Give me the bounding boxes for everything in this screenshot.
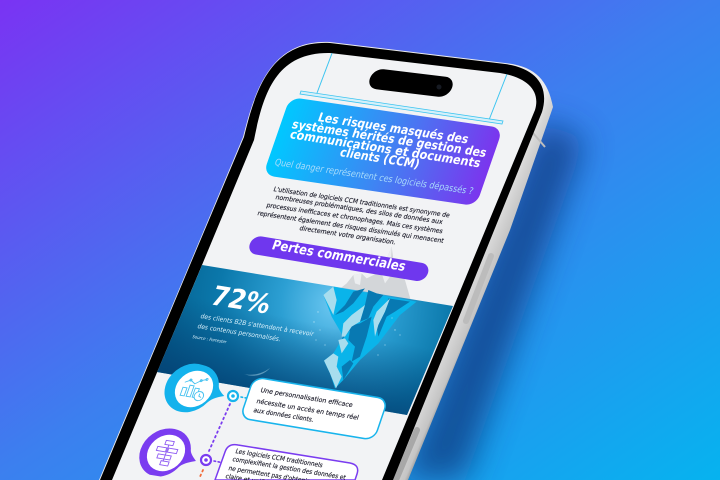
black bezel [100, 43, 544, 480]
statistic 72%: 72% [207, 281, 275, 320]
antenna band [533, 133, 545, 147]
hanging lines and rail [300, 48, 507, 124]
connector purple [214, 461, 224, 463]
callout 1: aux données clients. [252, 406, 315, 424]
intro paragraph: nombreuses problématiques, des silos de données aux [274, 193, 444, 226]
statistic description: des contenus personnalisés. [196, 322, 282, 343]
title banner [263, 97, 503, 206]
power button [396, 430, 417, 480]
faint diver silhouette [244, 368, 270, 376]
callout 1 [240, 377, 388, 440]
intro paragraph: L'utilisation de logiciels CCM traditionnels est synonyme de [272, 185, 451, 219]
dotted timeline [209, 404, 230, 451]
banner title: systèmes hérités de gestion des [290, 116, 489, 160]
chart and clock glyph [180, 378, 208, 402]
volume button [466, 256, 491, 321]
flow glyph [156, 440, 178, 466]
banner title [288, 109, 489, 171]
connector blue [241, 397, 251, 399]
banner title: clients (CCM) [338, 144, 422, 171]
source: Source : Forrester [191, 334, 228, 345]
icon bubble: data chart [164, 364, 224, 412]
icon bubble: data silos [139, 428, 196, 476]
intro paragraph: directement votre organisation. [298, 224, 397, 246]
phone shadow [400, 120, 585, 480]
callout 2: Les logiciels CCM traditionnels [234, 447, 325, 469]
water specks [313, 311, 401, 356]
intro paragraph [256, 185, 451, 246]
screen [112, 53, 536, 480]
intro paragraph: représentent également des risques dissimulés qui menacent [256, 209, 445, 245]
timeline node blue [228, 391, 238, 401]
callout 2 [215, 445, 358, 480]
silver phone body [99, 42, 553, 480]
dynamic island notch [369, 69, 453, 97]
timeline node purple [201, 455, 211, 465]
phone mockup [90, 30, 585, 480]
iceberg underwater [323, 287, 417, 388]
intro paragraph: processus inefficaces et chronophages. Mais ces systèmes [265, 201, 445, 235]
iceberg above water [341, 247, 410, 299]
banner title: communications et documents [288, 126, 483, 170]
callout 1: nécessite un accès en temps réel [255, 397, 360, 422]
section heading pill: Pertes commerciales [270, 237, 408, 275]
banner title: Les risques masqués des [316, 109, 471, 146]
statistic description: des clients B2B s'attendent à recevoir [199, 312, 315, 338]
underwater panel [157, 265, 453, 415]
banner subtitle: Quel danger représentent ces logiciels dépassés ? [273, 157, 475, 197]
callout 1: Une personnalisation efficace [259, 386, 354, 409]
